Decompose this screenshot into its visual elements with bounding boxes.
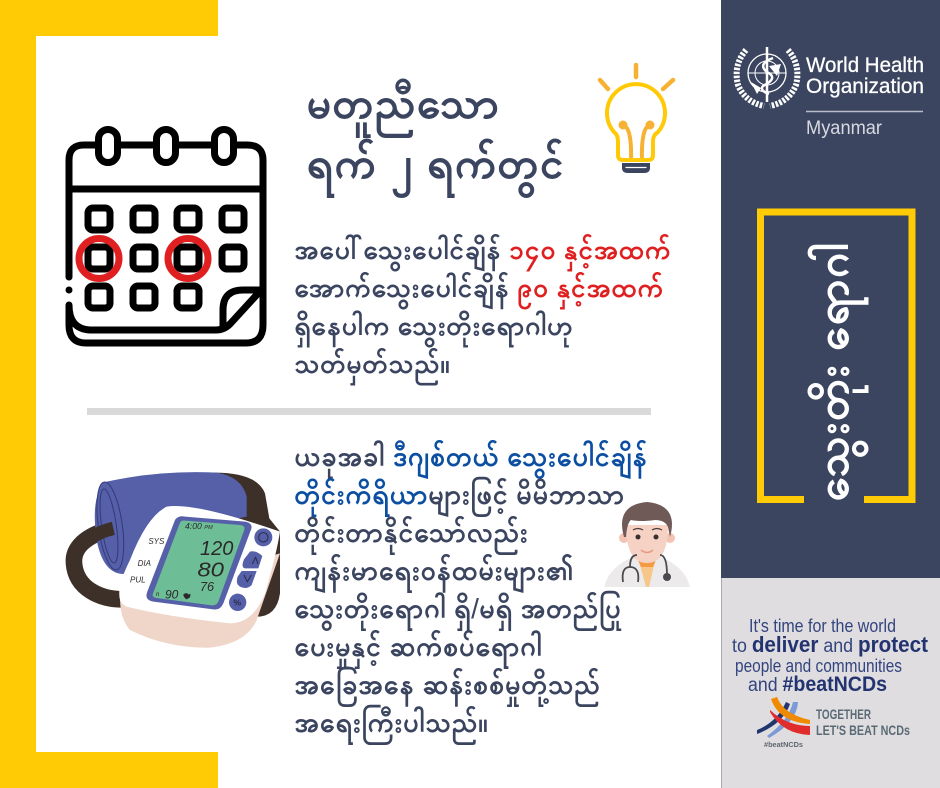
text: သွေးတိုး ရောဂါ: [807, 242, 858, 502]
beat NCDs message: and #beatNCDs: [748, 673, 887, 696]
text block: blood pressure thresholds: ရှိနေပါက သွေးတိုးရောဂါဟု: [294, 310, 573, 341]
icon: blood pressure monitor: n: [156, 592, 160, 598]
icon: light bulb: [598, 62, 676, 173]
icon: blood pressure monitor: 80: [197, 560, 224, 582]
WHO logo: World Health: [806, 53, 924, 77]
text block: home monitoring advice: [294, 440, 647, 745]
title: ရက် ၂ ရက်တွင်: [306, 139, 564, 188]
icon: blood pressure monitor: 90: [165, 587, 179, 601]
text block: home monitoring advice: ကျန်းမာရေးဝန်ထမ်းများ၏: [294, 555, 573, 586]
text block: home monitoring advice: ယခုအခါ ဒီဂျစ်တယ် သွေးပေါင်ချိန်: [294, 441, 647, 472]
icon: blood pressure monitor: SYS: [148, 537, 165, 546]
yellow corner frame: [0, 0, 218, 788]
text block: home monitoring advice: ပေးမှုနှင့် ဆက်စပ်ရောဂါ: [294, 631, 542, 662]
beat NCDs logo: #beatNCDs: [764, 740, 803, 749]
right navy panel: [721, 0, 940, 578]
icon: blood pressure monitor: 120: [200, 538, 233, 560]
icon: blood pressure monitor: DIA: [138, 559, 151, 568]
right grey panel: [721, 578, 940, 788]
icon: blood pressure monitor: 76: [200, 580, 215, 594]
text block: home monitoring advice: အရေးကြီးပါသည်။: [294, 707, 488, 738]
WHO emblem: [737, 47, 797, 106]
WHO logo: [734, 47, 924, 139]
beat NCDs message: to deliver and protect: [732, 632, 929, 657]
text block: home monitoring advice: တိုင်းတာနိုင်သော်လည်း: [294, 517, 528, 548]
icon: blood pressure monitor: [66, 472, 280, 648]
beat NCDs message: people and communities: [735, 656, 902, 676]
text block: home monitoring advice: တိုင်းကိရိယာများဖြင့် မိမိဘာသာ: [294, 479, 625, 510]
text block: home monitoring advice: အခြေအနေ ဆန်းစစ်မှုတို့သည်: [294, 669, 600, 700]
yellow bracket frame: [757, 208, 916, 503]
text block: blood pressure thresholds: [294, 234, 671, 386]
title: [306, 78, 564, 198]
beat NCDs logo: LET'S BEAT NCDs: [816, 722, 910, 738]
WHO logo: Organization: [806, 74, 924, 98]
beat NCDs logo: TOGETHER: [816, 706, 871, 722]
beat NCDs message: [732, 616, 929, 696]
text block: blood pressure thresholds: အောက်သွေးပေါင်ချိန် ၉၀ နှင့်အထက်: [294, 272, 664, 303]
icon: calendar: [66, 126, 266, 346]
title: မတူညီသော: [306, 79, 500, 128]
text block: home monitoring advice: သွေးတိုးရောဂါ ရှိ/မရှိ အတည်ပြု: [294, 593, 621, 624]
icon: doctor: [604, 502, 690, 587]
beat NCDs message: It's time for the world: [749, 616, 896, 636]
text block: blood pressure thresholds: သတ်မှတ်သည်။: [294, 348, 450, 379]
text block: blood pressure thresholds: အပေါ်သွေးပေါင်ချိန် ၁၄၀ နှင့်အထက်: [294, 234, 671, 265]
icon: blood pressure monitor: %: [233, 598, 241, 608]
WHO logo: Myanmar: [806, 118, 883, 139]
beat NCDs logo: [757, 697, 910, 749]
icon: blood pressure monitor: PUL: [130, 575, 146, 584]
divider: [87, 408, 651, 415]
icon: blood pressure monitor: 4:00 PM: [185, 521, 213, 531]
